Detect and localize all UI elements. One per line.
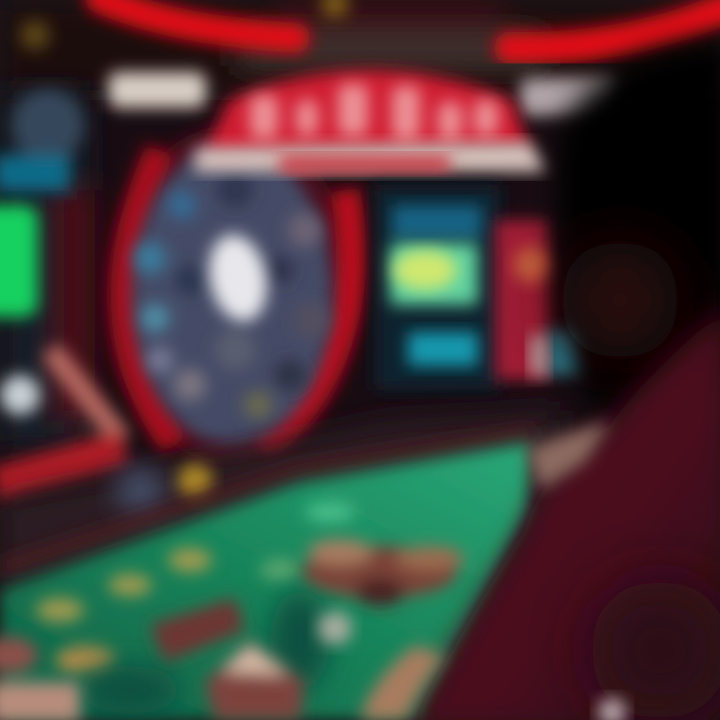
wheel mottling	[134, 172, 329, 419]
table rail	[0, 432, 535, 568]
chips on table	[0, 539, 464, 720]
person shoulder, maroon	[410, 305, 720, 720]
floor	[0, 410, 560, 600]
ceiling	[0, 0, 720, 100]
table markings	[36, 502, 355, 674]
roulette wheel	[107, 125, 357, 465]
person hand	[528, 422, 610, 490]
ceiling sign lights	[20, 0, 618, 116]
red awning	[195, 70, 548, 172]
person head, dark	[558, 40, 720, 410]
dark table patches	[80, 590, 330, 714]
yellow chip	[177, 463, 213, 499]
green table	[0, 442, 530, 720]
wheel white centre	[201, 229, 275, 327]
ceiling red arcs	[100, 0, 720, 48]
person silhouette	[360, 40, 720, 720]
left slot machine	[0, 89, 125, 485]
right slot machine	[375, 185, 590, 395]
